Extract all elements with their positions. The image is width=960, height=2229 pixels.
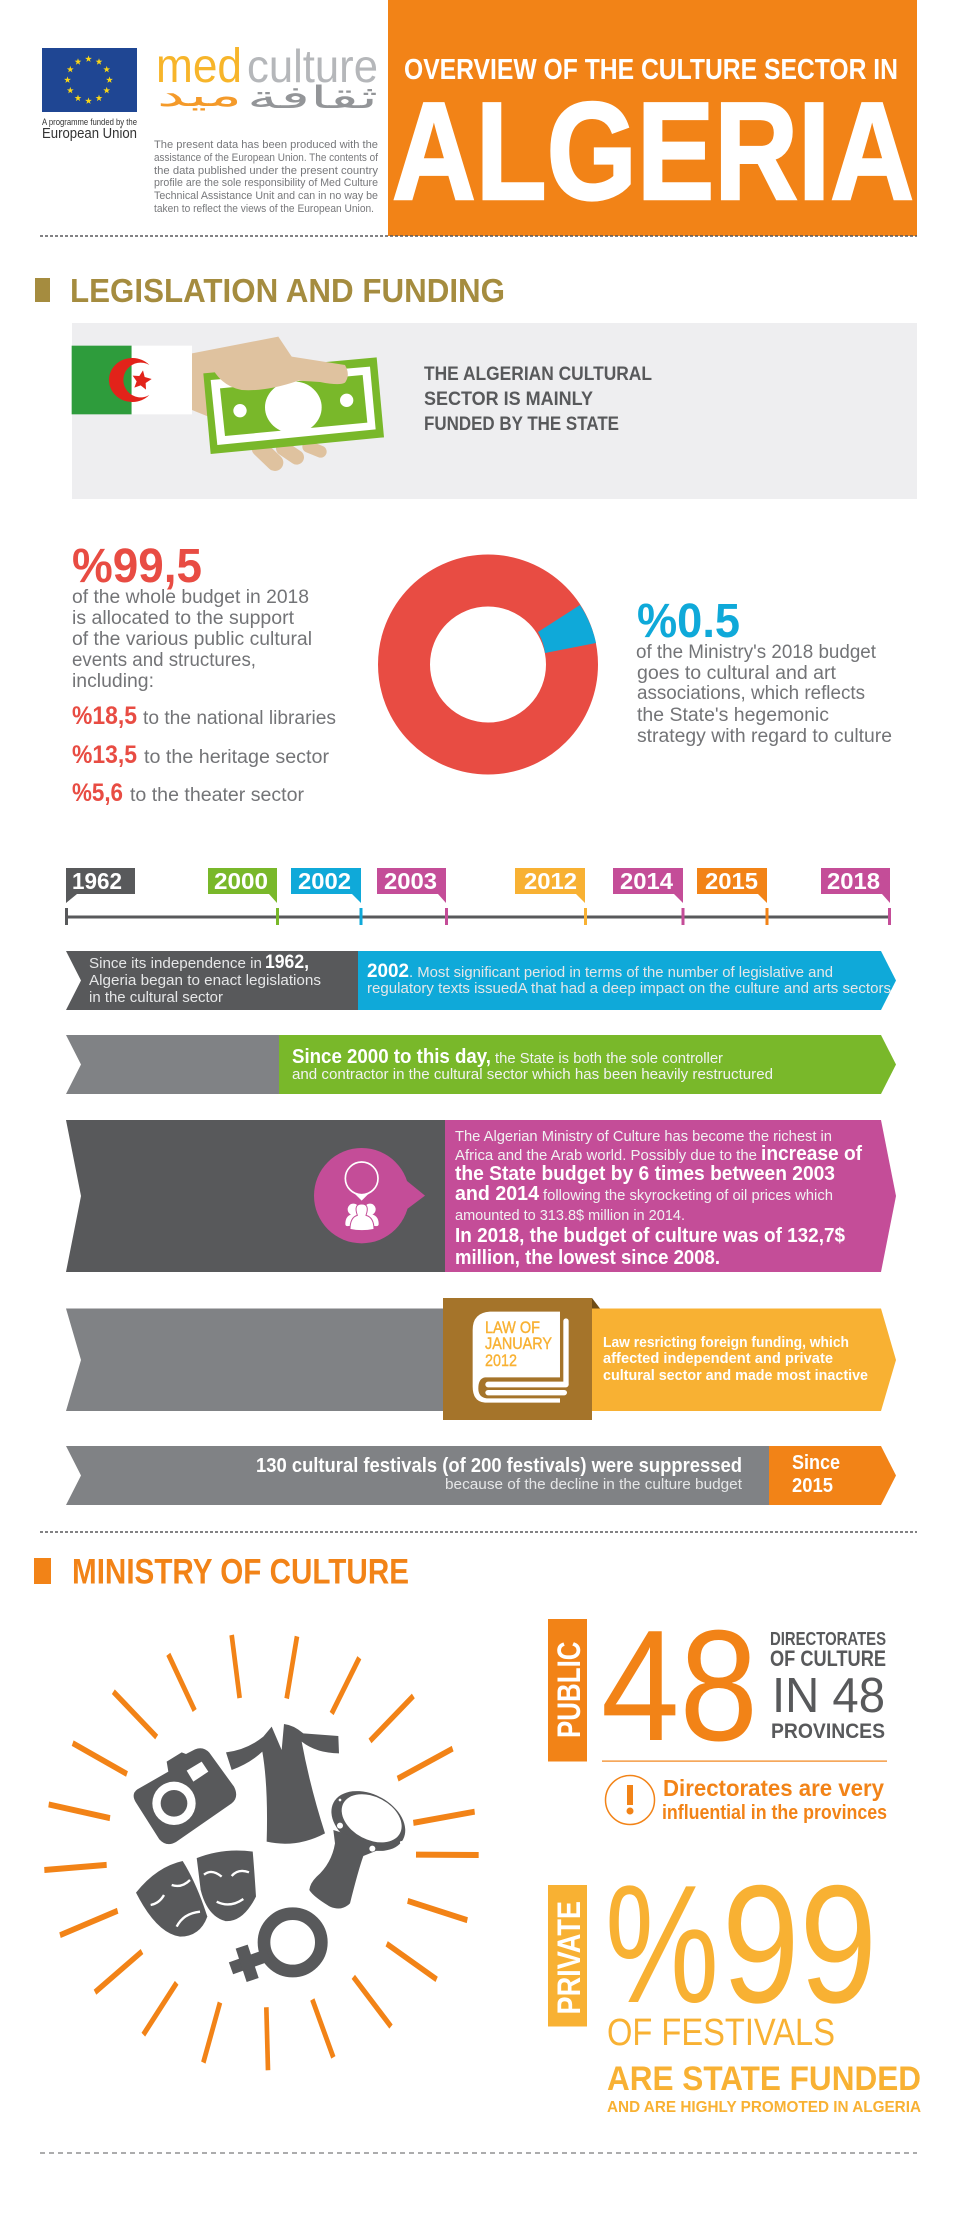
list: budget allocations: to the theater sector [130, 785, 305, 806]
panel: private: 99 [722, 1850, 877, 2038]
funding statement: FUNDED BY THE STATE [424, 414, 619, 435]
band: law of January 2012: cultural sector and made most inactive [603, 1367, 868, 1384]
icon: speech bubble and people [314, 1148, 425, 1243]
directorates text: DIRECTORATES [770, 1629, 886, 1649]
band: ministry budget: Africa and the Arab world. Possibly due to the [455, 1147, 757, 1164]
icon: law book: LAW OF [485, 1318, 540, 1337]
callout: directorates influence [606, 1775, 887, 1824]
icon: Med Culture logo: culture [247, 40, 378, 92]
icon: law book: JANUARY [485, 1334, 552, 1353]
disclaimer text: taken to reflect the views of the European Union. [154, 203, 374, 215]
band: since 2000: Since 2000 to this day, [292, 1046, 491, 1068]
panel: public [548, 1598, 887, 1824]
callout: directorates influence: influential in the provinces [662, 1802, 887, 1824]
list: budget allocations: %5,6 [72, 779, 123, 807]
band: law of January 2012: Law resricting foreign funding, which [603, 1334, 849, 1351]
panel: private: PRIVATE [551, 1901, 587, 2014]
stat: 0.5 percent: %0.5 [637, 595, 740, 648]
band: ministry budget: the State budget by 6 times between 2003 [455, 1163, 835, 1185]
callout: directorates influence: Directorates are very [663, 1775, 884, 1801]
panel: private: AND ARE HIGHLY PROMOTED IN ALGERIA [607, 2099, 921, 2116]
stat: 99.5 percent [72, 540, 312, 692]
timeline: 2012 [524, 868, 577, 894]
icon: theatre masks [136, 1850, 257, 1937]
band: 1962 and 2002: 2002 [367, 961, 409, 982]
icon: Algerian flag [72, 346, 192, 414]
illustration: culture icons with rays [44, 1635, 479, 2070]
band: 1962 and 2002: Algeria began to enact legislations [89, 972, 321, 989]
disclaimer text: Technical Assistance Unit and can in no way be [154, 190, 378, 202]
icon: hand holding banknote [192, 337, 384, 463]
icon: female symbol [231, 1914, 321, 1980]
icon: EU flag logo: A programme funded by the [42, 117, 137, 128]
panel: private: ARE STATE FUNDED [607, 2060, 921, 2098]
band: since 2015: Since [792, 1452, 840, 1474]
stat: 99.5 percent: of the whole budget in 2018 [72, 587, 309, 608]
band: ministry budget: increase of [761, 1143, 862, 1165]
band: since 2000: and contractor in the cultural sector which has been heavily restructured [292, 1066, 773, 1083]
timeline: 2014 [620, 868, 673, 894]
panel: public: PUBLIC [551, 1642, 587, 1738]
stat: 99.5 percent: %99,5 [72, 540, 202, 593]
band: ministry budget: million, the lowest since 2008. [455, 1247, 720, 1269]
stat: 0.5 percent: strategy with regard to culture [637, 726, 892, 747]
icon: Med Culture logo: med [156, 40, 242, 93]
panel: state funding [72, 323, 917, 499]
band: ministry budget: following the skyrocketing of oil prices which [543, 1187, 833, 1204]
disclaimer text: profile are the sole responsibility of Med Culture [154, 177, 378, 189]
disclaimer text: assistance of the European Union. The contents of [154, 152, 379, 164]
list: budget allocations: %13,5 [72, 741, 137, 769]
band: 1962 and 2002: in the cultural sector [89, 989, 223, 1006]
icon: camera [134, 1748, 236, 1844]
stat: 0.5 percent [636, 595, 892, 747]
timeline: 2003 [384, 868, 437, 894]
stat: 0.5 percent: goes to cultural and art [637, 663, 837, 684]
band: 1962 and 2002: Since its independence in [89, 955, 262, 972]
timeline: 2002 [298, 868, 351, 894]
band: law of January 2012: affected independent and private [603, 1350, 833, 1367]
funding statement: SECTOR IS MAINLY [424, 389, 593, 410]
stat: 99.5 percent: events and structures, [72, 650, 256, 671]
band: 1962 and 2002: . Most significant period in terms of the number of legislative and [409, 964, 833, 981]
list: budget allocations: %18,5 [72, 702, 137, 730]
funding statement: THE ALGERIAN CULTURAL [424, 364, 652, 385]
band: ministry budget [66, 1120, 896, 1272]
band: since 2015: because of the decline in the culture budget [445, 1476, 743, 1493]
icon: drum [309, 1779, 416, 1909]
band: ministry budget: In 2018, the budget of culture was of 132,7$ [455, 1225, 845, 1247]
sun rays [44, 1635, 479, 2070]
heading: legislation and funding: LEGISLATION AND FUNDING [70, 272, 505, 309]
list: budget allocations: to the heritage sector [144, 747, 330, 768]
icon: law book [473, 1312, 569, 1403]
disclaimer text: The present data has been produced with the [154, 139, 378, 151]
band: 1962 and 2002: 1962, [265, 952, 309, 973]
directorates text: IN 48 [772, 1669, 885, 1723]
panel: public: 48 [601, 1598, 758, 1774]
band: 1962 and 2002 [66, 951, 896, 1010]
heading: ministry of culture: MINISTRY OF CULTURE [72, 1552, 409, 1592]
stat: 99.5 percent: is allocated to the support [72, 608, 295, 629]
timeline: 2015 [705, 868, 758, 894]
stat: 0.5 percent: associations, which reflects [637, 683, 865, 704]
band: ministry budget: amounted to 313.8$ million in 2014. [455, 1207, 685, 1224]
icon: dress [226, 1724, 339, 1844]
title panel [388, 0, 917, 236]
icon: EU flag logo: European Union [42, 126, 137, 142]
directorates text: OF CULTURE [770, 1646, 886, 1671]
timeline: 1962 [72, 868, 122, 894]
list: budget allocations: to the national libraries [143, 708, 336, 729]
icon: Med Culture logo: ميد [157, 78, 242, 114]
panel: private: OF FESTIVALS [607, 2012, 835, 2054]
band: law of January 2012 [66, 1298, 896, 1420]
directorates text [770, 1629, 886, 1743]
stat: 99.5 percent: of the various public cultural [72, 629, 312, 650]
stat: 0.5 percent: the State's hegemonic [637, 705, 829, 726]
band: since 2000 [66, 1035, 896, 1094]
timeline [65, 868, 891, 925]
band: since 2015: 130 cultural festivals (of 200 festivals) were suppressed [256, 1455, 742, 1477]
disclaimer text [154, 139, 379, 215]
disclaimer text: the data published under the present country [154, 165, 379, 177]
funding statement [424, 364, 652, 435]
icon: law book: 2012 [485, 1351, 517, 1370]
timeline: 2000 [214, 868, 268, 894]
timeline: 2018 [827, 868, 880, 894]
band: since 2015: 2015 [792, 1475, 833, 1497]
band: since 2000: the State is both the sole controller [495, 1050, 723, 1067]
band: ministry budget: and 2014 [455, 1183, 540, 1205]
icon: EU flag logo [42, 48, 137, 142]
stat: 99.5 percent: including: [72, 671, 154, 692]
band: ministry budget: The Algerian Ministry of Culture has become the richest in [455, 1128, 832, 1145]
panel: private: % [605, 1850, 719, 2038]
band: since 2015 [66, 1446, 896, 1505]
stat: 0.5 percent: of the Ministry's 2018 budget [636, 642, 877, 663]
band: 1962 and 2002: regulatory texts issuedA that had a deep impact on the culture and arts sectors [367, 980, 891, 997]
icon: Med Culture logo: ثقافة [247, 80, 378, 116]
panel: private [548, 1850, 921, 2116]
list: budget allocations [72, 702, 336, 807]
directorates text: PROVINCES [771, 1720, 885, 1743]
donut chart [404, 580, 596, 748]
icon: Med Culture logo [156, 40, 378, 116]
